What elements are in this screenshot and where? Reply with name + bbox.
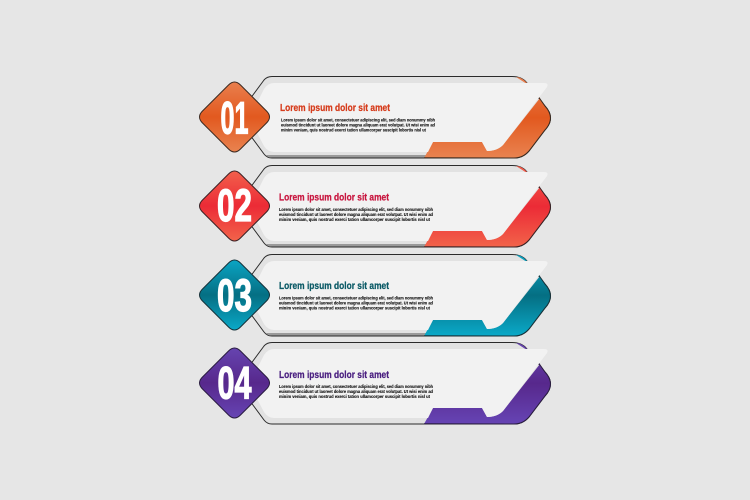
heading 01: Lorem ipsum dolor sit amet	[280, 102, 390, 114]
card outline	[250, 166, 550, 247]
panel: step 03	[200, 254, 550, 336]
body text 02: euismod tincidunt ut laoreet dolore magna aliquam erat volutpat. Ut wisi enim ad	[279, 212, 433, 217]
accent ribbon	[424, 166, 550, 247]
number 03: 03	[217, 270, 252, 321]
panel: step 02	[200, 166, 550, 247]
panel: step 01	[200, 76, 550, 158]
heading 02: Lorem ipsum dolor sit amet	[279, 192, 389, 204]
body text 03: minim veniam, quis nostrud exerci tation ullamcorper suscipit lobortis nisl ut	[279, 306, 431, 310]
number 04: 04	[218, 358, 252, 408]
body text 03: Lorem ipsum dolor sit amet, consectetuer adipiscing elit, sed diam nonummy nibh	[279, 296, 433, 300]
diamond badge 01	[200, 82, 270, 152]
body text 01: minim veniam, quis nostrud exerci tation ullamcorper suscipit lobortis nisl ut	[281, 128, 427, 132]
body text 03: euismod tincidunt ut laoreet dolore magna aliquam erat volutpat. Ut wisi enim ad	[279, 300, 433, 306]
bottom shadow band	[266, 333, 430, 336]
accent ribbon	[424, 343, 550, 424]
body text 02: Lorem ipsum dolor sit amet, consectetuer adipiscing elit, sed diam nonummy nibh	[279, 207, 433, 212]
accent ribbon	[424, 77, 550, 158]
white content panel	[252, 83, 548, 152]
white content panel	[252, 349, 548, 418]
body text 04: minim veniam, quis nostrud exerci tation ullamcorper suscipit lobortis nisl ut	[279, 394, 431, 399]
number 01: 01	[220, 92, 248, 144]
body text 04	[279, 384, 433, 399]
diamond badge 02	[200, 171, 270, 241]
card outline	[250, 76, 550, 158]
white content panel	[252, 172, 548, 241]
body text 01	[281, 118, 435, 132]
heading 04: Lorem ipsum dolor sit amet	[279, 369, 389, 381]
number 02: 02	[217, 180, 252, 231]
body text 02: minim veniam, quis nostrud exerci tation ullamcorper suscipit lobortis nisl ut	[279, 217, 431, 222]
diamond badge 03	[200, 260, 270, 330]
body text 01: Lorem ipsum dolor sit amet, consectetuer adipiscing elit, sed diam nonummy nibh	[281, 118, 435, 122]
panel: step 04	[200, 342, 550, 424]
card outline	[250, 254, 550, 336]
white content panel	[252, 261, 548, 330]
body text 03	[279, 296, 433, 310]
diamond badge 04	[200, 348, 270, 418]
body text 01: euismod tincidunt ut laoreet dolore magna aliquam erat volutpat. Ut wisi enim ad	[281, 122, 435, 128]
heading 03: Lorem ipsum dolor sit amet	[279, 280, 389, 292]
body text 02	[279, 207, 433, 222]
card outline	[250, 342, 550, 424]
body text 04: Lorem ipsum dolor sit amet, consectetuer adipiscing elit, sed diam nonummy nibh	[279, 384, 433, 389]
bottom shadow band	[266, 244, 430, 246]
accent ribbon	[424, 255, 550, 336]
bottom shadow band	[266, 155, 430, 158]
body text 04: euismod tincidunt ut laoreet dolore magna aliquam erat volutpat. Ut wisi enim ad	[279, 389, 433, 394]
